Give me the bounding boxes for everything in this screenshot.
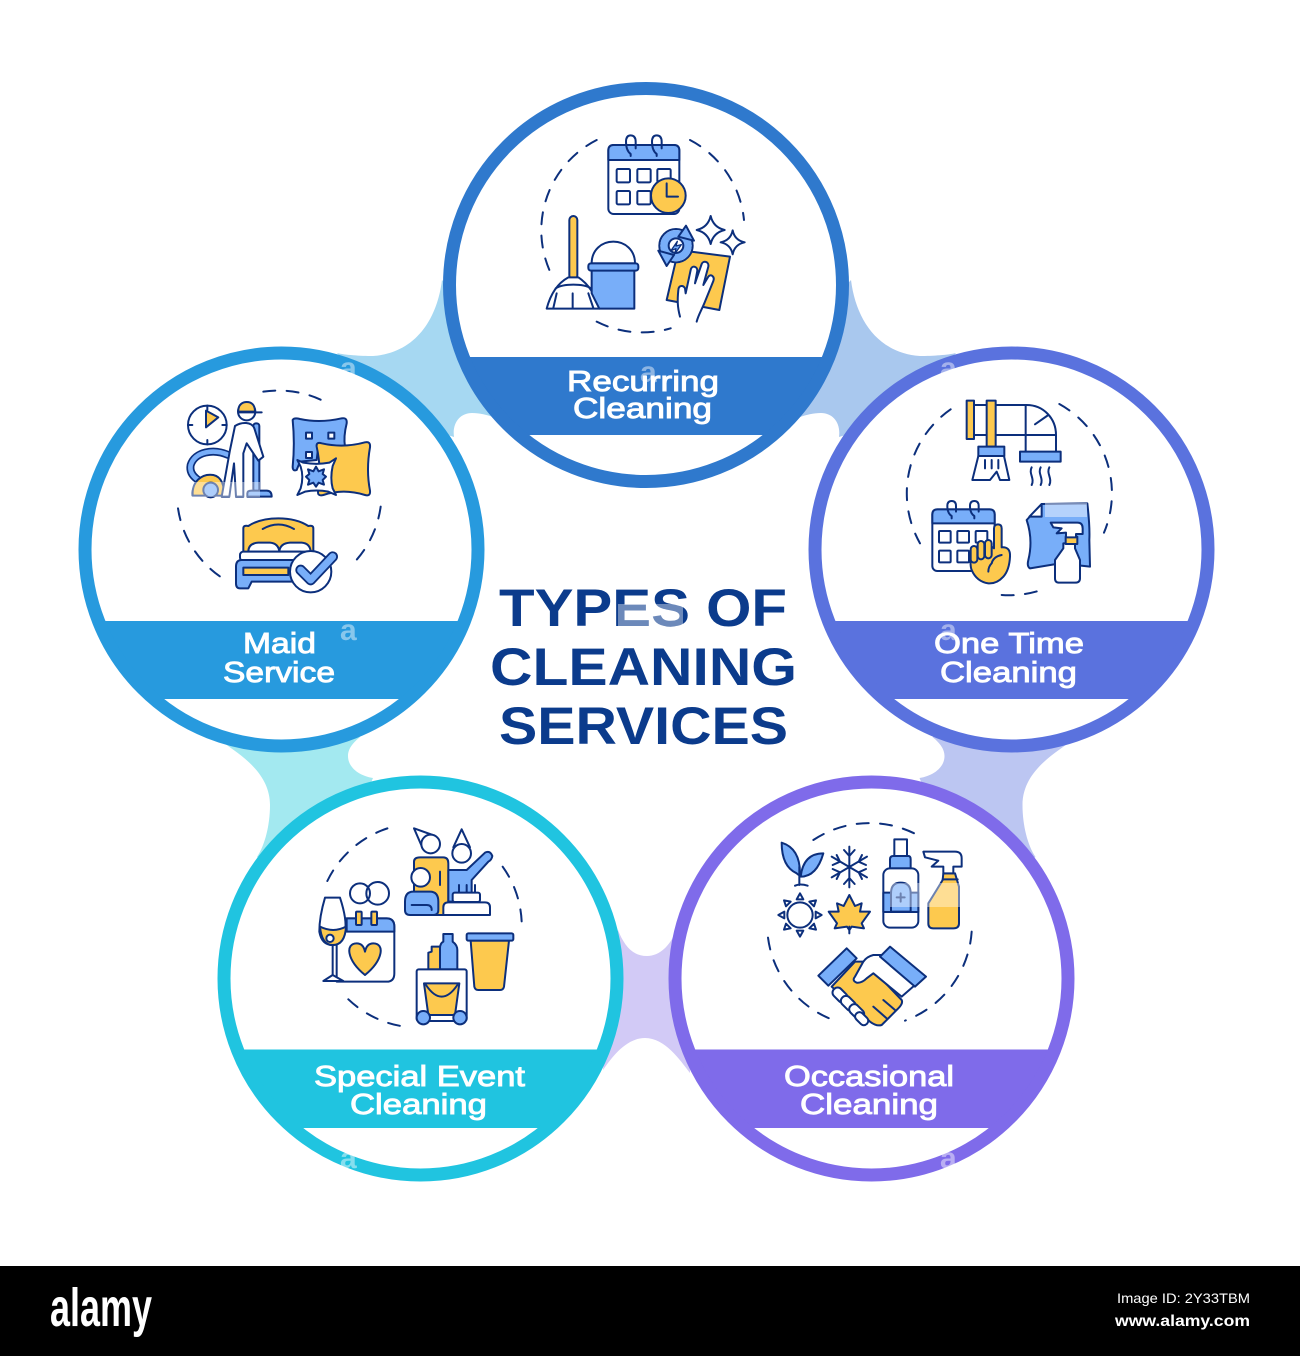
watermark marks: a [940, 352, 957, 385]
icon group: seasons, bottles, handshake [768, 823, 972, 1027]
circle background [224, 782, 617, 1175]
ring [450, 88, 842, 482]
label [934, 628, 1084, 689]
connector: recurring to one time [793, 280, 956, 437]
ring [815, 353, 1208, 746]
watermark marks: a [940, 1142, 957, 1175]
watermark marks: a [340, 352, 357, 385]
icon group: calendar, broom, bucket, cloth [541, 135, 745, 332]
ring [675, 782, 1068, 1175]
label: Recurring [567, 366, 719, 398]
label band [244, 1050, 597, 1128]
panel: one time cleaning [805, 353, 1217, 746]
watermark marks [192, 352, 1087, 1175]
label [314, 1061, 525, 1121]
panel: special event cleaning [214, 782, 626, 1175]
watermark marks: a [640, 356, 657, 389]
panel: recurring cleaning [440, 88, 852, 482]
connector: recurring to maid [337, 280, 500, 437]
icon group: party, wedding calendar, cleaning cart [319, 826, 522, 1027]
circle background [85, 353, 478, 746]
title: CLEANING [490, 638, 797, 697]
watermark marks: a [340, 614, 357, 647]
label: Cleaning [573, 393, 712, 425]
footer logo: alamy [50, 1278, 152, 1338]
label: Cleaning [800, 1089, 938, 1121]
connector: one time to occasional [920, 700, 1072, 900]
icon group: duct, calendar, cloth and spray [907, 401, 1112, 595]
label band [695, 1050, 1048, 1128]
label band [470, 357, 822, 435]
label: Cleaning [350, 1089, 487, 1121]
title [490, 579, 797, 756]
circle background [450, 88, 842, 482]
title: TYPES OF [499, 579, 787, 638]
ring [85, 353, 478, 746]
connector: maid to special event [220, 700, 373, 900]
title: SERVICES [499, 697, 788, 756]
label: Service [223, 657, 335, 689]
label [223, 628, 335, 689]
footer image id: Image ID: 2Y33TBM [1117, 1290, 1250, 1306]
label: Maid [243, 628, 316, 660]
footer bar [0, 1266, 1300, 1356]
circle background [675, 782, 1068, 1175]
label [784, 1061, 954, 1121]
label: Cleaning [940, 657, 1077, 689]
footer url: www.alamy.com [1114, 1313, 1250, 1330]
label band [836, 621, 1188, 699]
circle background [815, 353, 1208, 746]
label: Occasional [784, 1061, 954, 1093]
connector: special event to occasional [603, 930, 690, 1073]
watermark marks: a [940, 614, 957, 647]
watermark marks: a [340, 1142, 357, 1175]
panel: occasional cleaning [665, 782, 1077, 1175]
label [567, 366, 719, 425]
ring [224, 782, 617, 1175]
label: One Time [934, 628, 1084, 660]
panel: maid service [75, 353, 487, 746]
label band [106, 621, 458, 699]
label: Special Event [314, 1061, 525, 1093]
icon group: worker, pillows, bed [178, 391, 381, 592]
